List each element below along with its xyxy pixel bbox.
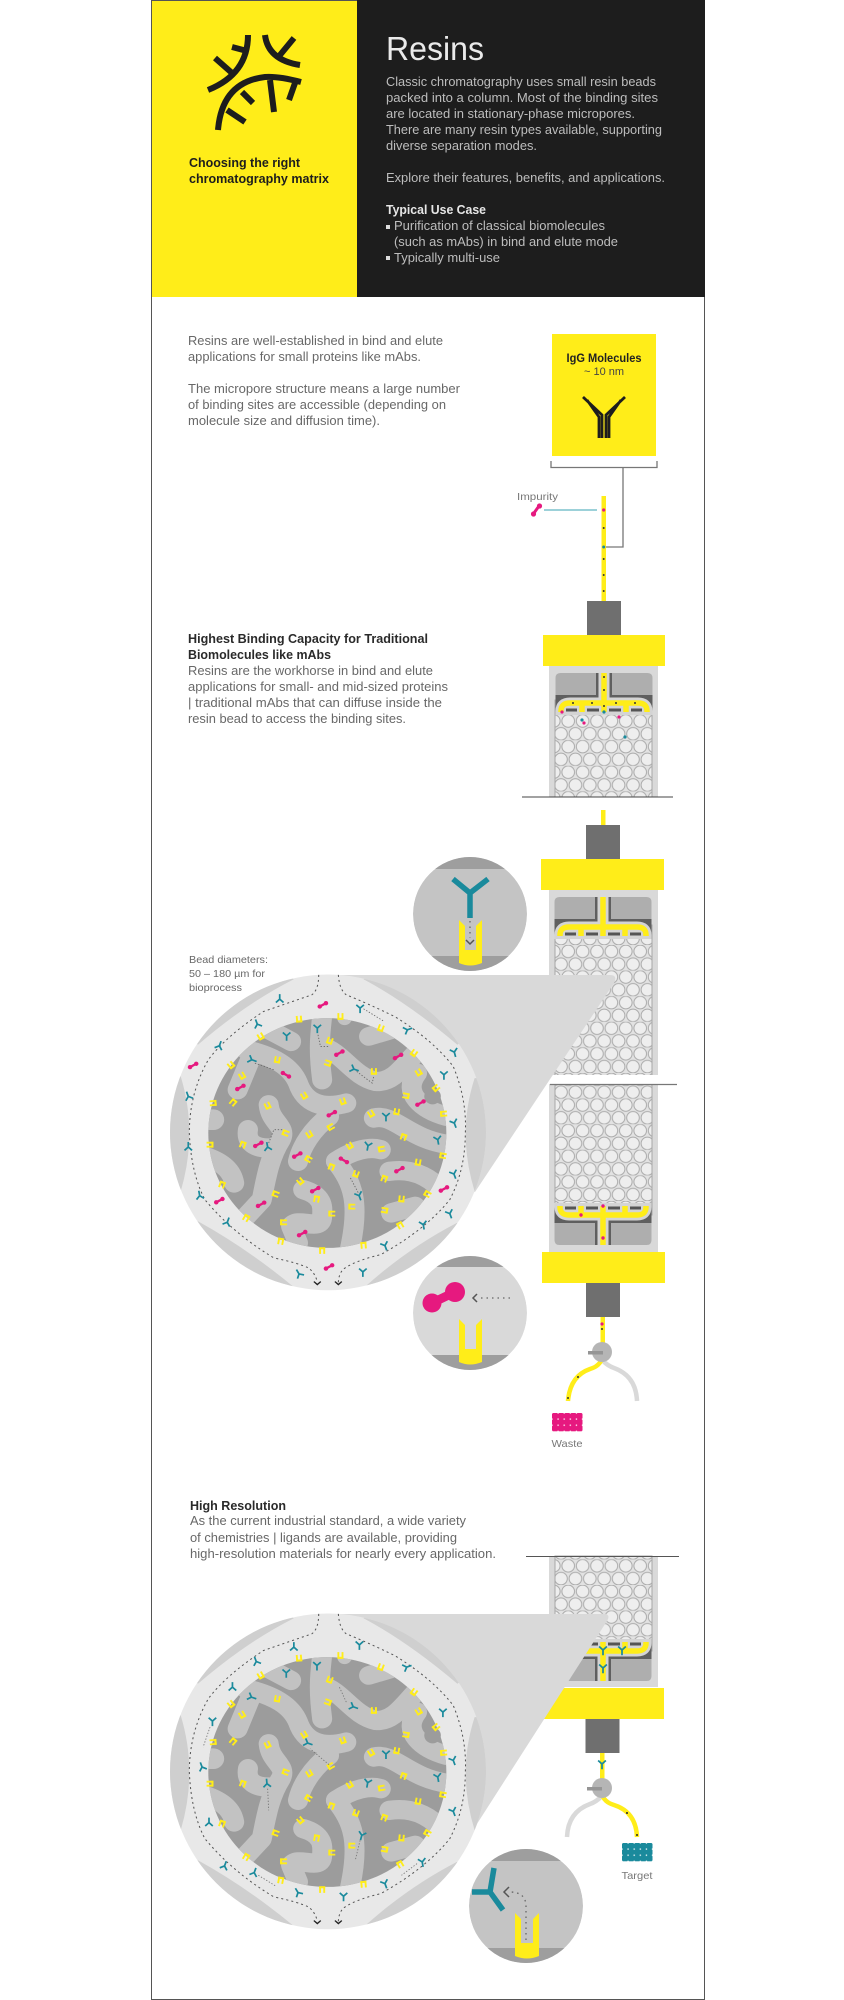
panel: IgG molecules — [552, 334, 656, 456]
text block: highest binding capacity: Resins are the workhorse in bind and elute — [188, 664, 433, 678]
text block: high resolution: As the current industrial standard, a wide variety — [190, 1514, 467, 1528]
text block: intro — [386, 75, 665, 185]
text block: intro: Classic chromatography uses small resin beads — [386, 75, 656, 89]
text block: established: applications for small proteins like mAbs. — [188, 350, 421, 364]
text block: highest binding capacity: | traditional mAbs that can diffuse inside the — [188, 696, 442, 710]
label: bead diameters: bioprocess — [189, 982, 242, 994]
text block: typical use case — [386, 203, 618, 265]
text block: established: The micropore structure means a large number — [188, 382, 460, 396]
text block: typical use case: Typical Use Case — [386, 203, 486, 217]
title: Resins — [386, 30, 484, 67]
icon: antibody branches — [208, 35, 301, 130]
text block: highest binding capacity: Highest Binding Capacity for Traditional — [188, 632, 428, 646]
panel: yellow header — [152, 1, 357, 297]
callout wedge 1 — [330, 975, 615, 1192]
icon: IgG — [583, 397, 625, 438]
text block: intro: Explore their features, benefits, and applications. — [386, 171, 665, 185]
callout: antibody binding — [410, 855, 530, 974]
feed tube with molecules — [602, 496, 606, 601]
heading: choosing the right matrix: Choosing the right — [189, 156, 301, 170]
page frame — [152, 0, 704, 2000]
heading: choosing the right matrix — [189, 156, 329, 186]
text block: intro: diverse separation modes. — [386, 139, 537, 153]
target label: Target — [622, 1870, 653, 1882]
impurity label — [517, 491, 597, 517]
text block: typical use case: Typically multi-use — [394, 251, 500, 265]
text block: typical use case: (such as mAbs) in bind and elute mode — [394, 235, 618, 249]
waste label: Waste — [552, 1438, 583, 1450]
heading: choosing the right matrix: chromatography matrix — [189, 172, 329, 186]
impurities — [188, 1001, 449, 1271]
column section 2 — [540, 810, 685, 1317]
text block: typical use case: Purification of classical biomolecules — [394, 219, 605, 233]
text block: established: molecule size and diffusion time). — [188, 414, 380, 428]
callout wedge 2 — [330, 1614, 608, 1827]
callout: impurity passes — [410, 1254, 530, 1373]
antibodies — [197, 1642, 459, 1901]
text block: highest binding capacity — [188, 632, 448, 726]
antibodies — [183, 994, 460, 1279]
text block: intro: There are many resin types available, supporting — [386, 123, 662, 137]
label: bead diameters: 50 – 180 µm for — [189, 968, 266, 980]
panel: dark header — [357, 0, 705, 297]
text block: highest binding capacity: Biomolecules like mAbs — [188, 648, 331, 662]
target molecules — [622, 1843, 652, 1861]
label: bead diameters: Bead diameters: — [189, 954, 268, 966]
panel: IgG molecules: ~ 10 nm — [584, 366, 624, 378]
bracket connector — [551, 461, 657, 547]
text block: high resolution: High Resolution — [190, 1499, 286, 1513]
text block: intro: are located in stationary-phase micropores. — [386, 107, 635, 121]
waste molecules — [552, 1413, 582, 1431]
bead 2 cross-section — [153, 1579, 505, 1962]
text block: high resolution — [190, 1499, 496, 1561]
text block: established — [188, 334, 460, 428]
column section 3 — [526, 1556, 679, 1753]
panel: IgG molecules: IgG Molecules — [566, 353, 642, 365]
text block: high resolution: high-resolution materials for nearly every application. — [190, 1547, 496, 1561]
column section 1 — [522, 601, 673, 797]
text block: established: of binding sites are accessible (depending on — [188, 398, 446, 412]
text block: highest binding capacity: applications for small- and mid-sized proteins — [188, 680, 448, 694]
text block: highest binding capacity: resin bead to access the binding sites. — [188, 712, 406, 726]
outlet with valve: target — [567, 1753, 653, 1882]
callout: target release — [465, 1847, 585, 1966]
text block: established: Resins are well-established in bind and elute — [188, 334, 443, 348]
bead 1 cross-section — [153, 940, 505, 1323]
text block: high resolution: of chemistries | ligands are available, providing — [190, 1531, 457, 1545]
label: bead diameters — [189, 954, 268, 994]
outlet with valve: waste — [552, 1317, 637, 1450]
text block: intro: packed into a column. Most of the binding sites — [386, 91, 658, 105]
impurity label: Impurity — [517, 491, 559, 503]
